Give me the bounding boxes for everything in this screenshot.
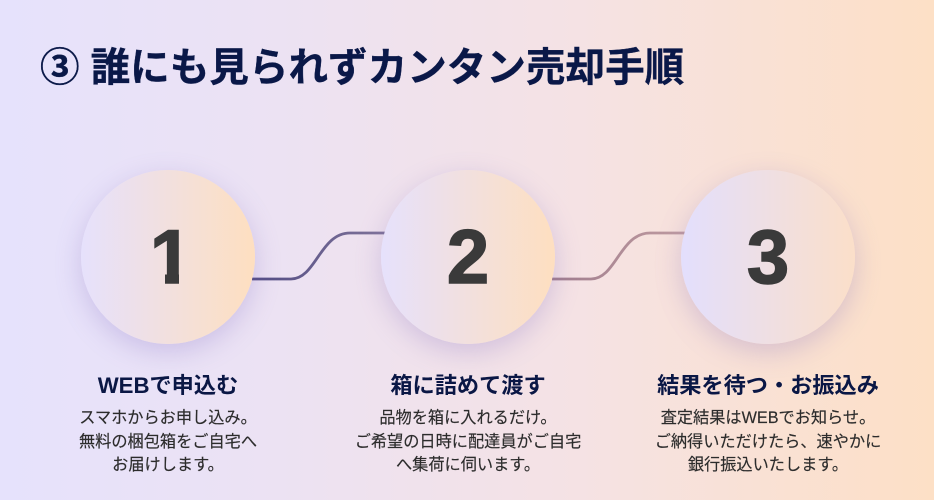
connector 2 to 3 (552, 233, 685, 279)
step 3 text: 銀行振込いたします。 (688, 456, 848, 474)
step 3 text: 結果を待つ・お振込み (657, 373, 879, 398)
circle: step 3: 3 (747, 215, 789, 300)
step 3 text (655, 373, 881, 474)
step 2 text: 箱に詰めて渡す (390, 373, 546, 398)
step 1 text: スマホからお申し込み。 (79, 409, 257, 427)
circle: step 2: 2 (447, 215, 489, 300)
circle: step 1 (81, 170, 255, 344)
step 2 text: へ集荷に伺います。 (396, 456, 540, 474)
circle: step 3 (681, 170, 855, 344)
step 2 text: 品物を箱に入れるだけ。 (379, 409, 557, 427)
step 1 text: WEBで申込む (98, 373, 238, 398)
step 1 text: お届けします。 (112, 456, 224, 474)
step 1 text: 無料の梱包箱をご自宅へ (79, 432, 257, 450)
step 2 text: ご希望の日時に配達員がご自宅 (355, 432, 581, 450)
step 1 text (79, 373, 257, 474)
circle: step 1: 1 (150, 215, 192, 300)
step 2 text (355, 373, 581, 474)
title: ③ 誰にも見られずカンタン売却手順 (40, 46, 684, 90)
circle: step 2 (381, 170, 555, 344)
step 3 text: 査定結果はWEBでお知らせ。 (661, 409, 875, 427)
connector 1 to 2 (252, 233, 385, 279)
step 3 text: ご納得いただけたら、速やかに (655, 432, 881, 450)
